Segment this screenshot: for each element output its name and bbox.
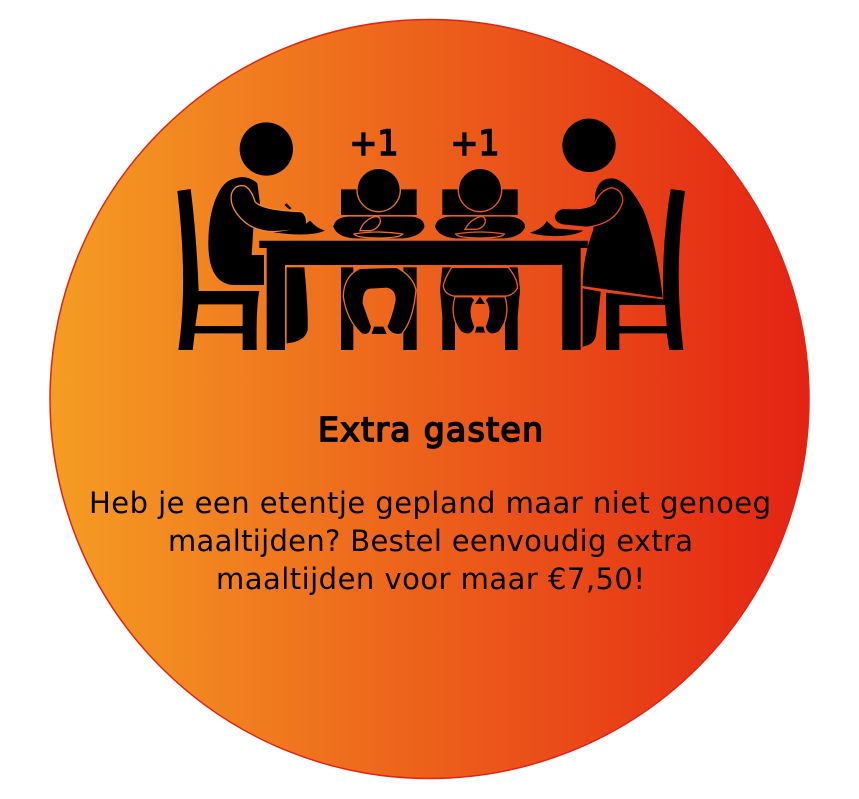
- icon: table: [259, 241, 588, 350]
- icon: right child guest: [435, 168, 525, 350]
- body text: maaltijden? Bestel eenvoudig extra: [168, 524, 693, 558]
- body text: Heb je een etentje gepland maar niet genoeg: [89, 486, 771, 520]
- icon: left child guest: [333, 168, 424, 350]
- icon: dinner table with four people: [177, 119, 685, 350]
- plus one label right: +1: [450, 124, 500, 164]
- body text: maaltijden voor maar €7,50!: [216, 562, 645, 596]
- plus one label left: +1: [350, 124, 398, 164]
- icon: right adult at table: [530, 119, 685, 350]
- icon: left adult at table: [177, 122, 325, 350]
- heading: Extra gasten: [318, 410, 543, 449]
- body text: [89, 486, 771, 596]
